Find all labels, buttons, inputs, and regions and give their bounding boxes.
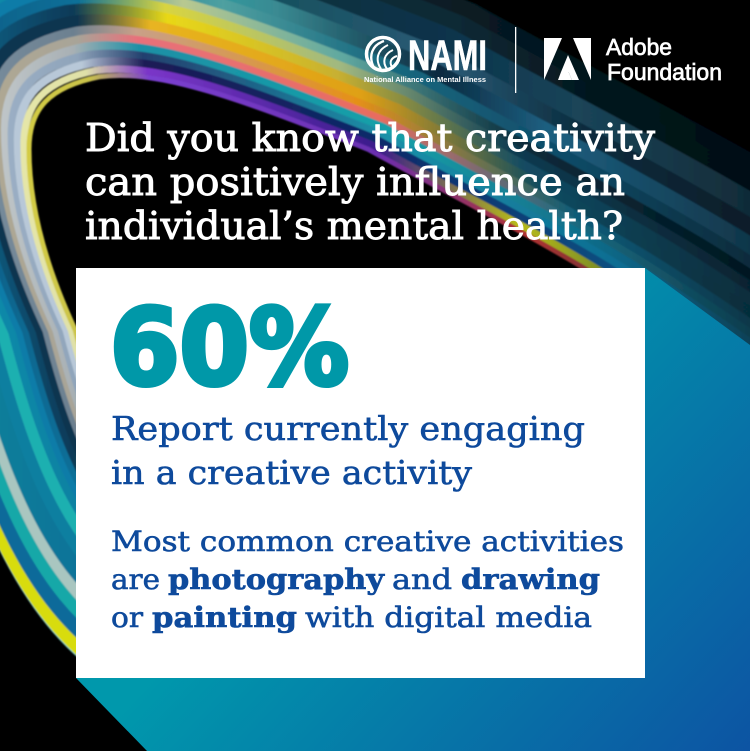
- creative activities text: [111, 525, 624, 634]
- logo divider: [515, 27, 516, 93]
- creative activities text: drawing: [461, 563, 600, 596]
- big statistic: 60%: [110, 287, 349, 409]
- title: Did you know that creativity: [85, 116, 656, 160]
- creative activities text: with digital media: [305, 601, 592, 634]
- creative activities text: painting: [152, 601, 297, 634]
- NAMI wordmark: NAMI: [408, 32, 487, 80]
- teal gradient triangle behind panel: [76, 268, 750, 751]
- title: individual’s mental health?: [85, 204, 623, 248]
- creative activities text: Most common creative activities: [111, 525, 624, 558]
- Adobe Foundation wordmark: [606, 34, 722, 85]
- Adobe Foundation wordmark: Adobe: [606, 34, 672, 60]
- statistic description: Report currently engaging: [111, 409, 585, 448]
- icon: Adobe mark: [544, 38, 591, 80]
- creative activities text: photography: [168, 563, 385, 596]
- NAMI full name: National Alliance on Mental Illness: [364, 75, 486, 84]
- black corner below the panel: [76, 678, 147, 751]
- Adobe Foundation wordmark: Foundation: [607, 59, 722, 85]
- creative activities text: or: [111, 601, 144, 634]
- title: can positively influence an: [85, 160, 625, 204]
- logos: [364, 27, 722, 93]
- title: [85, 116, 656, 248]
- white panel: [76, 268, 645, 678]
- statistic description: [111, 409, 585, 492]
- creative activities text: and: [392, 563, 452, 596]
- statistic description: in a creative activity: [111, 453, 472, 492]
- creative activities text: are: [111, 563, 160, 596]
- icon: NAMI swirl: [366, 38, 400, 70]
